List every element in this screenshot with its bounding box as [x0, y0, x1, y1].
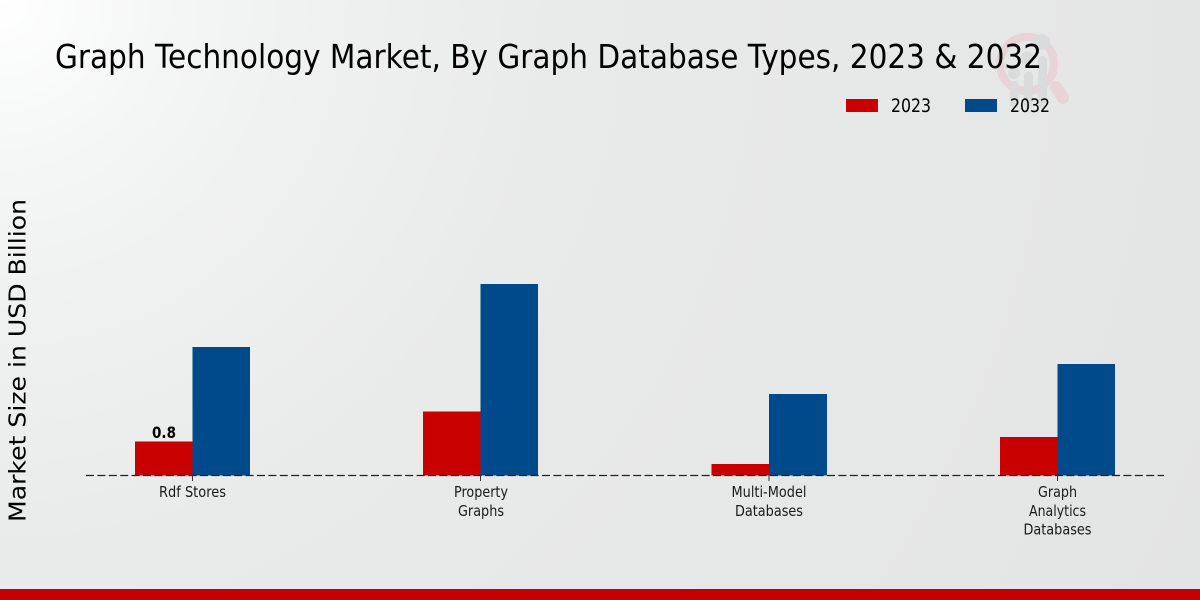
category label: Graph Analytics Databases — [1024, 483, 1092, 538]
group: Graph Analytics Databases — [1000, 364, 1115, 476]
legend item: 2023: 2023 — [891, 95, 931, 117]
category label: Rdf Stores: Rdf Stores — [159, 483, 226, 501]
category label: Property Graphs: Property — [454, 483, 508, 501]
category label: Graph Analytics Databases: Analytics — [1029, 502, 1086, 520]
legend item: 2023 — [846, 95, 931, 117]
category label: Property Graphs — [454, 483, 508, 520]
group: Rdf Stores — [135, 347, 250, 476]
group: Property Graphs — [423, 284, 538, 476]
icon: magnifier logo watermark — [1000, 34, 1063, 108]
legend item: 2032: 2032 — [1010, 95, 1050, 117]
axis baseline — [86, 474, 1164, 476]
y axis label: Market Size in USD Billion — [4, 199, 32, 522]
category label: Graph Analytics Databases: Graph — [1038, 483, 1077, 501]
value label: 0.8 — [152, 423, 176, 442]
category label: Property Graphs: Graphs — [458, 502, 504, 520]
title: Graph Technology Market, By Graph Database Types, 2023 & 2032 — [55, 37, 1042, 76]
legend — [846, 95, 1050, 117]
category label: Multi-Model Databases: Multi-Model — [732, 483, 806, 501]
category label: Multi-Model Databases: Databases — [735, 502, 803, 520]
group: Multi-Model Databases — [712, 394, 827, 476]
category label: Multi-Model Databases — [732, 483, 806, 520]
legend item: 2032 — [965, 95, 1050, 117]
category label: Graph Analytics Databases: Databases — [1024, 520, 1092, 538]
footer bar — [0, 589, 1200, 600]
bar chart — [86, 284, 1164, 481]
